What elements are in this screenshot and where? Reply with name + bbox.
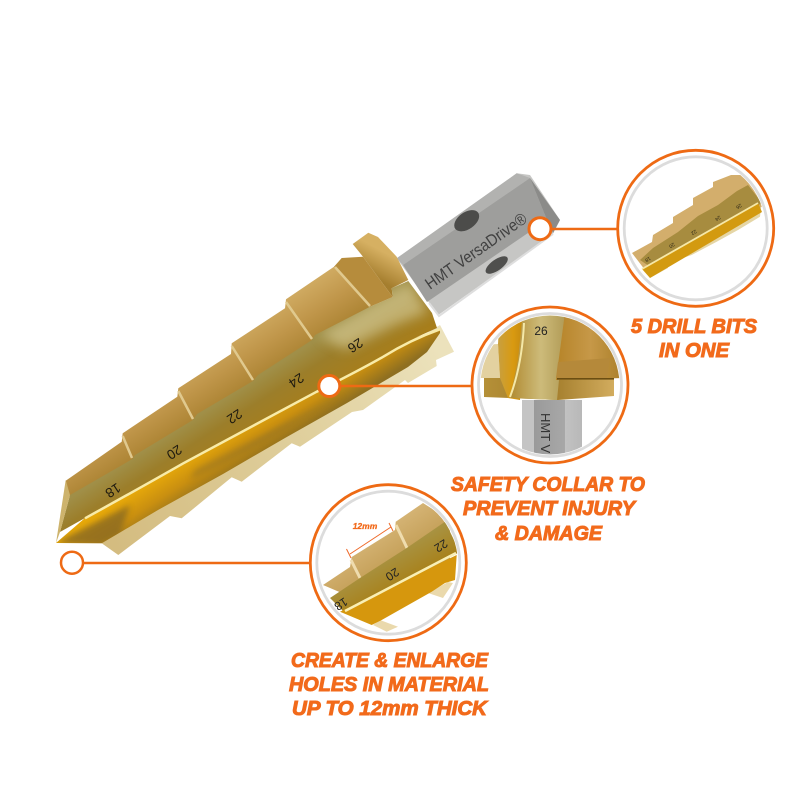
neck bbox=[334, 257, 393, 307]
hex shank: HMT VersaDrive® bbox=[422, 210, 531, 293]
caption: safety collar: PREVENT INJURY bbox=[463, 498, 637, 520]
inset collar view bbox=[480, 316, 620, 454]
bright edge line bbox=[85, 329, 440, 518]
caption: create and enlarge: HOLES IN MATERIAL bbox=[289, 674, 489, 696]
inset bit: 26 bbox=[734, 202, 743, 210]
caption: safety collar: SAFETY COLLAR TO bbox=[451, 474, 645, 496]
size markings: 24 bbox=[285, 370, 307, 391]
12mm label: 12mm bbox=[353, 521, 378, 531]
caption: create and enlarge: UP TO 12mm THICK bbox=[292, 698, 489, 720]
inset collar view: 26 bbox=[534, 324, 548, 338]
caption: create and enlarge bbox=[289, 650, 489, 720]
inset bit close-up bbox=[323, 503, 460, 632]
12mm dimension bbox=[346, 523, 393, 558]
caption: 5 drill bits bbox=[631, 316, 758, 362]
inset circle: 5 drill bits bbox=[618, 150, 774, 306]
inset bit close-up: 20 bbox=[383, 565, 402, 584]
inset bit: 22 bbox=[689, 228, 698, 236]
connector lines bbox=[84, 229, 620, 563]
marker: tip bbox=[61, 552, 83, 574]
main step drill bit bbox=[56, 173, 560, 555]
tip strip bbox=[56, 480, 70, 543]
flute shading bbox=[57, 416, 302, 544]
hex shank bbox=[397, 173, 560, 316]
lower pale teeth bbox=[100, 325, 454, 555]
inset bit close-up: 18 bbox=[331, 594, 350, 614]
caption: create and enlarge: CREATE & ENLARGE bbox=[291, 650, 489, 672]
caption: 5 drill bits: 5 DRILL BITS bbox=[631, 316, 758, 338]
inset circle: 12mm thickness bbox=[310, 485, 466, 641]
caption: 5 drill bits: IN ONE bbox=[659, 340, 730, 362]
inset bit close-up: 22 bbox=[431, 536, 450, 555]
size markings bbox=[103, 335, 366, 501]
inset collar view: HMT V bbox=[538, 413, 553, 454]
olive flute face bbox=[60, 281, 437, 532]
safety collar bbox=[353, 233, 408, 297]
size markings: 22 bbox=[224, 406, 245, 427]
marker: shank bbox=[529, 218, 551, 240]
size markings: 20 bbox=[164, 442, 185, 463]
orange flute bbox=[56, 329, 440, 543]
inset bit bbox=[632, 175, 765, 278]
inset bit: 20 bbox=[667, 241, 676, 249]
inset bit: 24 bbox=[713, 214, 722, 222]
size markings: 18 bbox=[103, 480, 123, 501]
upper stepped lands bbox=[66, 267, 370, 497]
pale shading near the collar bbox=[320, 282, 428, 350]
caption: safety collar bbox=[451, 474, 645, 545]
marker: flute bbox=[319, 376, 340, 396]
size markings: 26 bbox=[345, 335, 366, 356]
caption: safety collar: & DAMAGE bbox=[495, 523, 603, 545]
inset bit: 18 bbox=[643, 255, 652, 263]
step edges bbox=[123, 267, 370, 458]
inset circle: safety collar bbox=[472, 305, 628, 463]
